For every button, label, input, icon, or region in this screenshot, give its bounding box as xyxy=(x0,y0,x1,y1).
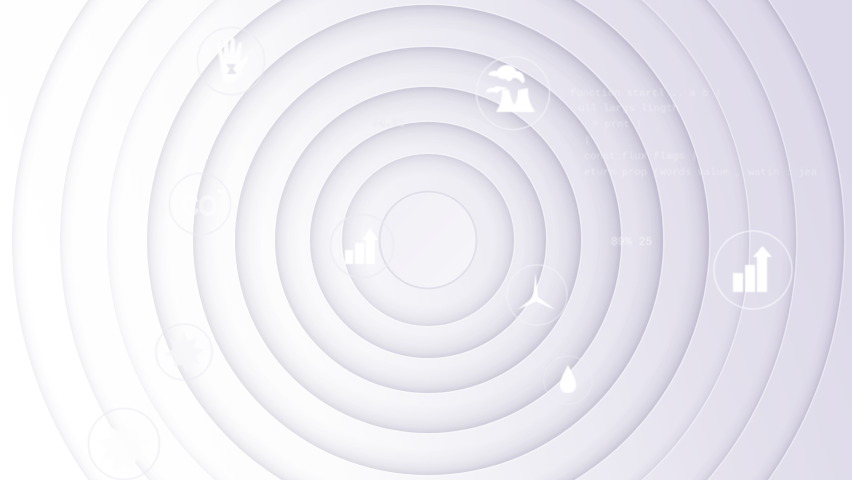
data label: 89% 25: 89% 25 xyxy=(611,236,653,249)
icon: wind turbine xyxy=(507,265,567,325)
icon: small bar chart xyxy=(330,214,394,278)
code snippet: = prnt | xyxy=(592,119,642,131)
code snippet: ull largs lingth xyxy=(578,103,679,115)
icon: power plant xyxy=(476,56,550,130)
code snippet xyxy=(570,88,817,179)
icon: water drop xyxy=(544,356,592,404)
icon: hand xyxy=(198,28,264,94)
icon: large bar chart xyxy=(714,231,792,309)
code snippet: function startl .. a b | xyxy=(570,88,721,100)
icon: virus small xyxy=(156,324,212,380)
icon: CO2 xyxy=(170,174,230,234)
code snippet: const flux flags | xyxy=(584,151,697,163)
icon: CO2: CO xyxy=(182,191,217,221)
data label: 94.01: 94.01 xyxy=(372,118,405,130)
code snippet: eturn prop (Words value , watin : jea xyxy=(584,167,817,179)
central disc xyxy=(380,192,476,288)
icon: virus large xyxy=(88,408,160,480)
code snippet: | xyxy=(584,135,590,147)
